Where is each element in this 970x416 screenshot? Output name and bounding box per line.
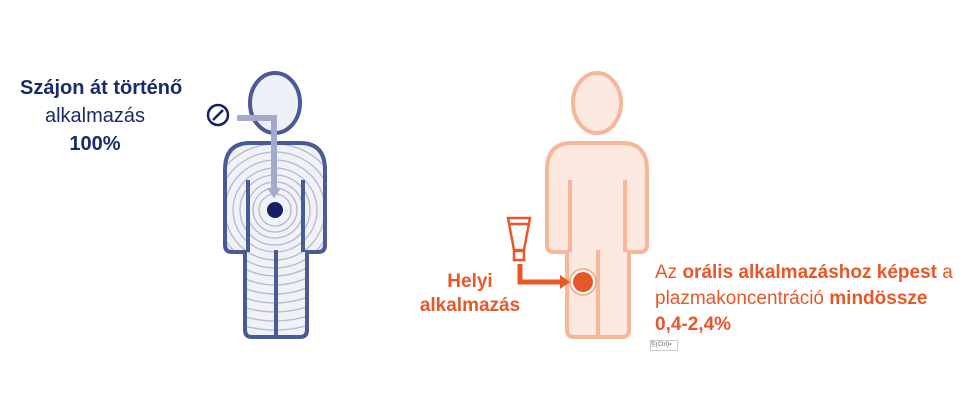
text: oral label: 100%: [69, 133, 121, 155]
text: plasma note: plazmakoncentráció mindössze: [655, 288, 927, 309]
icon: pill: [208, 105, 228, 125]
text: oral label: Szájon át történő: [20, 77, 182, 99]
text: oral label: [20, 77, 182, 155]
text: topical label: [420, 271, 520, 316]
text: topical label: alkalmazás: [420, 295, 520, 316]
figure: topical: [547, 73, 647, 337]
arrow: topical: [520, 264, 570, 289]
text: oral label: alkalmazás: [45, 105, 145, 127]
dot: application site: [570, 269, 596, 295]
icon: small widget: ⎘(Ctrl)▾: [651, 342, 672, 348]
text: plasma note: 0,4-2,4%: [655, 314, 731, 335]
icon: small widget: [650, 340, 678, 351]
icon: cream tube: [508, 218, 530, 260]
text: plasma note: Az orális alkalmazáshoz képest a: [655, 262, 953, 283]
figure: oral: [206, 71, 649, 339]
text: plasma note: [655, 262, 953, 335]
text: topical label: Helyi: [447, 271, 493, 292]
arrow: oral path: [237, 118, 281, 198]
